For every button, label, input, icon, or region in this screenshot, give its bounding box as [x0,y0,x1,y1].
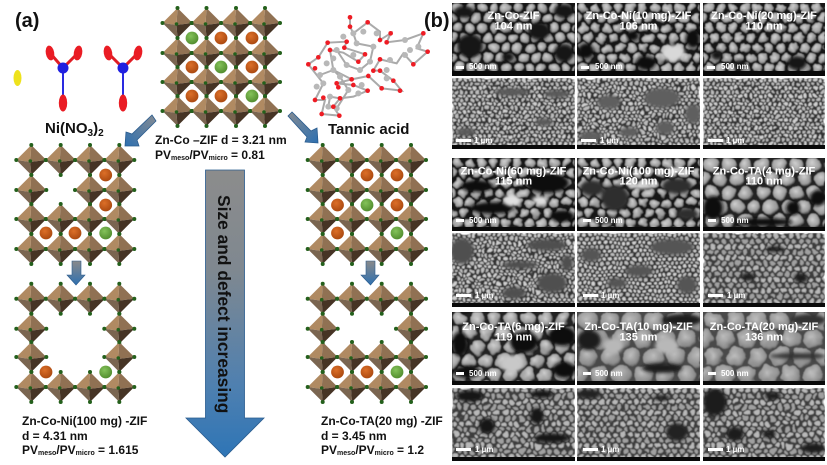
panel label (b): (b) [424,10,450,32]
text: central ZIF parameters [155,133,287,162]
SEM: Zn-Co-TA(4 mg)-ZIF 500 nm: 500 nm [721,216,749,225]
right lattice: TA etched stage 2 [306,282,428,404]
central ZIF lattice [160,6,282,128]
text: Ni ZIF parameters: = 1.615 [95,443,139,457]
text: Ni ZIF parameters: meso [38,450,56,457]
SEM: Zn-Co-TA(20 mg)-ZIF 500 nm: Zn-Co-TA(20 mg)-ZIF [710,321,819,333]
text: TA ZIF parameters: micro [375,450,394,457]
SEM: Zn-Co-Ni(100 mg)-ZIF 500 nm [577,158,700,231]
tannic acid molecule [306,15,430,118]
SEM: Zn-Co-TA(6 mg)-ZIF 500 nm [452,312,575,385]
heading: Ni(NO3)2: Ni(NO [45,120,88,137]
SEM: Zn-Co-ZIF 500 nm [452,3,575,76]
SEM: Zn-Co-ZIF 1 µm: 1 µm [474,136,492,145]
SEM: Zn-Co-Ni(20 mg)-ZIF 500 nm: 110 nm [745,20,783,32]
SEM: Zn-Co-TA(20 mg)-ZIF 500 nm: 136 nm [745,332,783,344]
text: central ZIF parameters: meso [171,155,189,162]
text: Ni ZIF parameters: micro [76,450,95,457]
SEM: Zn-Co-Ni(10 mg)-ZIF 500 nm: 500 nm [595,62,623,71]
SEM: Zn-Co-TA(20 mg)-ZIF 1 µm: 1 µm [726,445,744,454]
icon: nitrate ion right [103,45,143,112]
panel label (a): (a) [15,10,39,32]
SEM: Zn-Co-TA(4 mg)-ZIF 500 nm [703,158,825,231]
SEM: Zn-Co-TA(10 mg)-ZIF 500 nm: 135 nm [620,332,658,344]
text: TA ZIF parameters [321,414,443,457]
text: Ni ZIF parameters: Zn-Co-Ni(100 mg) -ZIF [22,414,147,428]
text: TA ZIF parameters: d = 3.45 nm [321,429,387,443]
icon: nitrate ion left [45,45,83,112]
SEM: Zn-Co-TA(6 mg)-ZIF 1 µm: 1 µm [475,445,493,454]
SEM: Zn-Co-Ni(60 mg)-ZIF 500 nm: Zn-Co-Ni(60 mg)-ZIF [461,166,567,178]
SEM: Zn-Co-Ni(60 mg)-ZIF 1 µm [452,233,575,307]
text: central ZIF parameters: PV [155,148,171,162]
SEM: Zn-Co-Ni(20 mg)-ZIF 1 µm [703,78,825,149]
big arrow: size and defect increasing [186,170,264,457]
SEM: Zn-Co-TA(10 mg)-ZIF 1 µm: 1 µm [601,445,619,454]
SEM: Zn-Co-Ni(100 mg)-ZIF 1 µm: 1 µm [601,291,619,300]
text: central ZIF parameters: /PV [189,148,209,162]
SEM: Zn-Co-Ni(60 mg)-ZIF 500 nm: 115 nm [495,176,532,188]
SEM: Zn-Co-TA(20 mg)-ZIF 500 nm: 500 nm [721,369,749,378]
text: TA ZIF parameters: meso [337,450,355,457]
SEM: Zn-Co-TA(6 mg)-ZIF 1 µm [452,388,575,461]
SEM: Zn-Co-ZIF 500 nm: 104 nm [495,20,533,32]
SEM: Zn-Co-Ni(10 mg)-ZIF 500 nm [577,3,700,76]
SEM: Zn-Co-Ni(60 mg)-ZIF 500 nm: 500 nm [469,216,497,225]
text: Ni ZIF parameters: d = 4.31 nm [22,429,88,443]
SEM: Zn-Co-Ni(10 mg)-ZIF 1 µm [577,78,700,149]
text: central ZIF parameters: micro [209,155,228,162]
arrow: to Ni lattice [125,115,156,146]
SEM: Zn-Co-TA(20 mg)-ZIF 500 nm [703,312,825,385]
heading: Ni(NO3)2: 2 [98,128,104,139]
SEM: Zn-Co-ZIF 500 nm: 500 nm [469,62,497,71]
SEM: Zn-Co-Ni(60 mg)-ZIF 1 µm: 1 µm [475,291,493,300]
SEM: Zn-Co-Ni(100 mg)-ZIF 500 nm: Zn-Co-Ni(100 mg)-ZIF [583,166,695,178]
SEM: Zn-Co-TA(10 mg)-ZIF 500 nm: 500 nm [595,369,623,378]
text: Ni ZIF parameters: PV [22,443,38,457]
text: Ni ZIF parameters [22,414,147,457]
right lattice: TA etched stage 1 [306,143,428,266]
SEM: Zn-Co-Ni(20 mg)-ZIF 500 nm: Zn-Co-Ni(20 mg)-ZIF [711,10,817,22]
SEM: Zn-Co-Ni(60 mg)-ZIF 500 nm [452,158,575,231]
text: TA ZIF parameters: PV [321,443,337,457]
big arrow: size and defect increasing: Size and defect increasing [214,195,234,413]
SEM: Zn-Co-TA(20 mg)-ZIF 1 µm [703,388,825,461]
heading: Tannic acid: Tannic acid [328,121,409,138]
SEM: Zn-Co-Ni(100 mg)-ZIF 500 nm: 120 nm [620,176,658,188]
arrow: right lattice downwards [361,261,379,285]
heading: Ni(NO3)2: ) [93,120,98,137]
SEM: Zn-Co-Ni(100 mg)-ZIF 1 µm [577,233,700,307]
SEM: Zn-Co-TA(6 mg)-ZIF 500 nm: 119 nm [495,332,532,344]
SEM: Zn-Co-Ni(20 mg)-ZIF 500 nm [703,3,825,76]
SEM: Zn-Co-TA(4 mg)-ZIF 1 µm [703,233,825,307]
SEM: Zn-Co-TA(4 mg)-ZIF 500 nm: 110 nm [745,176,783,188]
SEM: Zn-Co-TA(10 mg)-ZIF 500 nm [577,312,700,385]
heading: Ni(NO3)2: 3 [88,128,94,139]
SEM: Zn-Co-Ni(20 mg)-ZIF 1 µm: 1 µm [726,136,744,145]
SEM: Zn-Co-Ni(20 mg)-ZIF 500 nm: 500 nm [721,62,749,71]
arrow: to TA lattice [288,112,318,143]
SEM: Zn-Co-ZIF 1 µm [452,78,575,149]
text: Ni ZIF parameters: /PV [56,443,76,457]
text: TA ZIF parameters: Zn-Co-TA(20 mg) -ZIF [321,414,443,428]
left lattice: Ni etched stage 1 [14,143,136,266]
SEM: Zn-Co-TA(6 mg)-ZIF 500 nm: Zn-Co-TA(6 mg)-ZIF [462,321,565,333]
SEM: Zn-Co-Ni(100 mg)-ZIF 500 nm: 500 nm [595,216,623,225]
arrow: left lattice downwards [67,261,85,285]
SEM: Zn-Co-TA(4 mg)-ZIF 1 µm: 1 µm [727,291,745,300]
SEM: Zn-Co-TA(4 mg)-ZIF 500 nm: Zn-Co-TA(4 mg)-ZIF [713,166,815,178]
text: TA ZIF parameters: /PV [355,443,375,457]
icon: yellow nickel ion [14,70,22,86]
text: central ZIF parameters: = 0.81 [228,148,265,162]
SEM: Zn-Co-ZIF 500 nm: Zn-Co-ZIF [488,10,540,22]
SEM: Zn-Co-TA(10 mg)-ZIF 500 nm: Zn-Co-TA(10 mg)-ZIF [584,321,693,333]
left lattice: Ni etched stage 2 [14,282,136,404]
text: TA ZIF parameters: = 1.2 [394,443,424,457]
SEM: Zn-Co-Ni(10 mg)-ZIF 500 nm: 106 nm [620,20,658,32]
SEM: Zn-Co-TA(6 mg)-ZIF 500 nm: 500 nm [469,369,497,378]
SEM: Zn-Co-Ni(10 mg)-ZIF 500 nm: Zn-Co-Ni(10 mg)-ZIF [586,10,692,22]
SEM: Zn-Co-Ni(10 mg)-ZIF 1 µm: 1 µm [600,136,618,145]
text: central ZIF parameters: Zn-Co –ZIF d = 3.21 nm [155,133,287,147]
SEM: Zn-Co-TA(10 mg)-ZIF 1 µm [577,388,700,461]
